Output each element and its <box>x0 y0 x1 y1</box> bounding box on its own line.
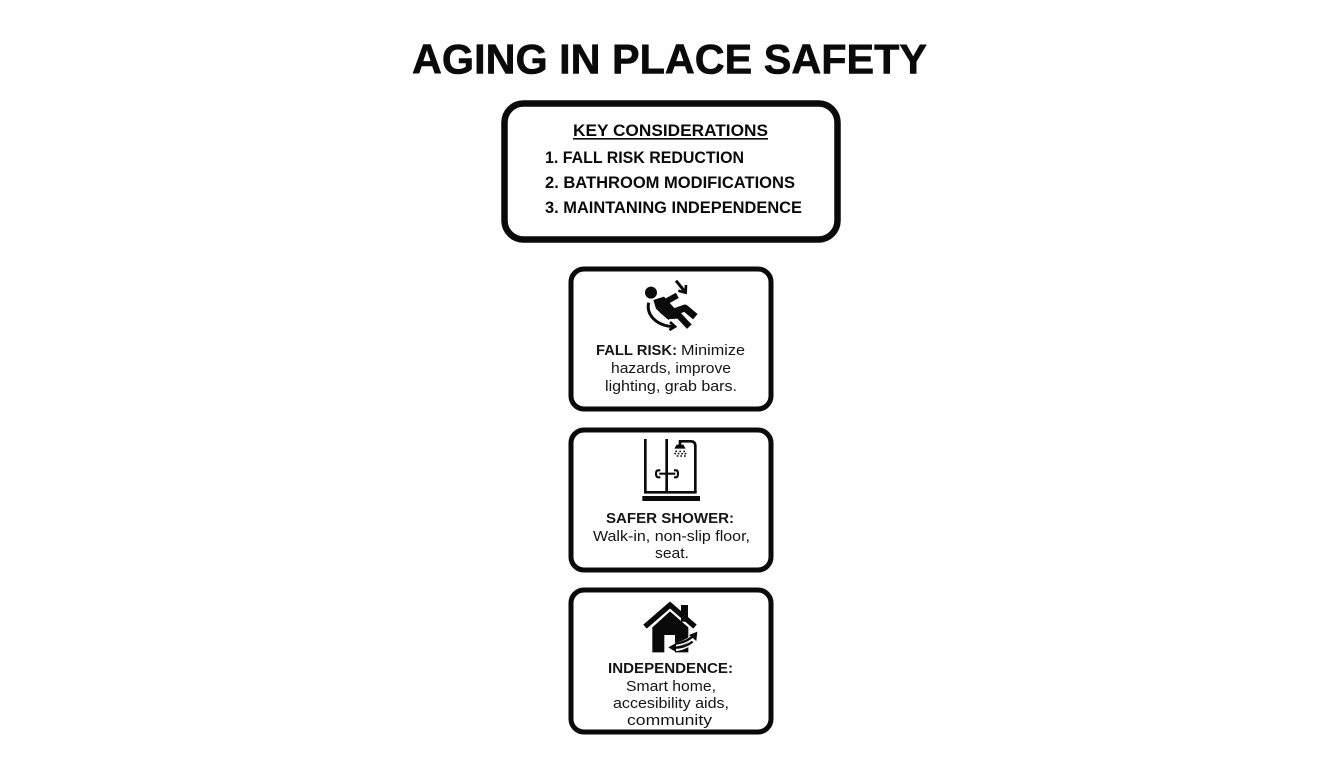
panel: safer shower <box>571 430 771 570</box>
list item 1: 1. FALL RISK REDUCTION <box>545 148 744 167</box>
list item 3: 3. MAINTANING INDEPENDENCE <box>545 198 802 217</box>
text: independence description: accesibility aids, <box>613 696 729 712</box>
list item 2: 2. BATHROOM MODIFICATIONS <box>545 173 795 192</box>
text: independence description: INDEPENDENCE: <box>608 661 733 677</box>
text: safer shower description: Walk-in, non-slip floor, <box>593 529 750 545</box>
text: safer shower description: seat. <box>655 546 689 562</box>
icon: walk-in shower <box>642 439 700 501</box>
text: fall risk description <box>596 343 745 395</box>
text: independence description: Smart home, <box>626 679 716 695</box>
panel: fall risk <box>571 269 771 409</box>
text: independence description: community <box>627 713 713 729</box>
text: fall risk description: hazards, improve <box>611 361 731 377</box>
text: fall risk description: Minimize <box>681 343 745 359</box>
text: fall risk description: lighting, grab bars. <box>605 379 737 395</box>
icon: falling person <box>645 281 695 330</box>
panel: independence <box>571 590 771 732</box>
text: fall risk description: FALL RISK: <box>596 343 677 359</box>
text: safer shower description <box>593 511 750 562</box>
text: safer shower description: SAFER SHOWER: <box>606 511 734 527</box>
panel: key considerations <box>504 104 838 240</box>
title: AGING IN PLACE SAFETY <box>412 36 927 82</box>
text: independence description <box>608 661 733 729</box>
heading: key considerations: KEY CONSIDERATIONS <box>573 121 768 140</box>
icon: house with arrows <box>645 605 697 652</box>
